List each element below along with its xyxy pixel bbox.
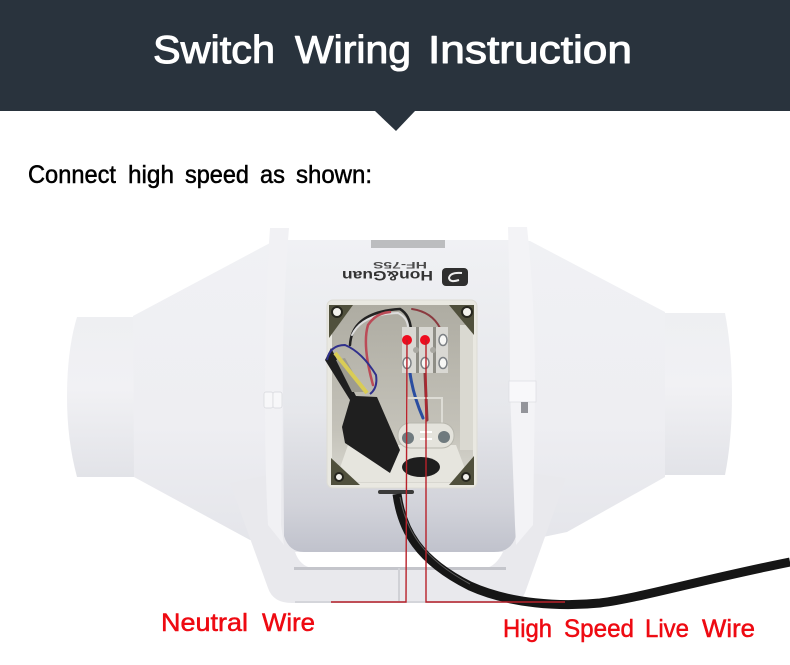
callout: high speed live wire leader: [420, 335, 565, 602]
callout: neutral wire leader: [331, 335, 412, 602]
header banner: [0, 0, 790, 131]
model text: HF-75S: [373, 260, 427, 270]
ring clips: [264, 381, 536, 413]
foot bracket: [230, 470, 566, 603]
instruction text: high: [128, 161, 174, 189]
title: Wiring: [295, 29, 411, 72]
terminal block: [402, 327, 448, 373]
power cable: [397, 494, 790, 605]
label: high speed live wire: [503, 615, 755, 643]
cable grommet: [402, 457, 440, 477]
label: neutral wire: Neutral: [161, 609, 248, 637]
instruction text: speed: [185, 161, 249, 189]
label: neutral wire: [161, 609, 315, 637]
title: Switch: [153, 29, 275, 72]
label: high speed live wire: Speed: [564, 615, 634, 643]
instruction text: as: [260, 161, 285, 189]
fan body: [282, 240, 516, 552]
capacitor: [325, 345, 400, 473]
label: neutral wire: Wire: [262, 609, 315, 637]
internal wires: [350, 309, 440, 420]
foot opening: [295, 552, 503, 568]
instruction text: [28, 161, 372, 189]
spec label: [371, 240, 445, 248]
label: high speed live wire: Live: [645, 615, 689, 643]
label: high speed live wire: High: [503, 615, 552, 643]
brand text: Hon&Guan: [342, 268, 433, 284]
corner posts: [329, 305, 474, 485]
junction box: [325, 300, 477, 488]
brand logo: [442, 268, 468, 286]
instruction text: shown:: [296, 161, 372, 189]
title: [153, 29, 632, 72]
left mounting ring: [265, 228, 289, 545]
box cable entry: [378, 490, 414, 494]
left and right cylinders: [67, 313, 732, 477]
screw holes: [332, 307, 472, 481]
right mounting ring: [508, 227, 535, 545]
label: high speed live wire: Wire: [702, 615, 755, 643]
cable clamp: [398, 398, 454, 448]
title: Instruction: [428, 29, 632, 72]
cones: [133, 241, 665, 545]
inline duct fan: [67, 227, 790, 605]
instruction text: Connect: [28, 161, 116, 189]
